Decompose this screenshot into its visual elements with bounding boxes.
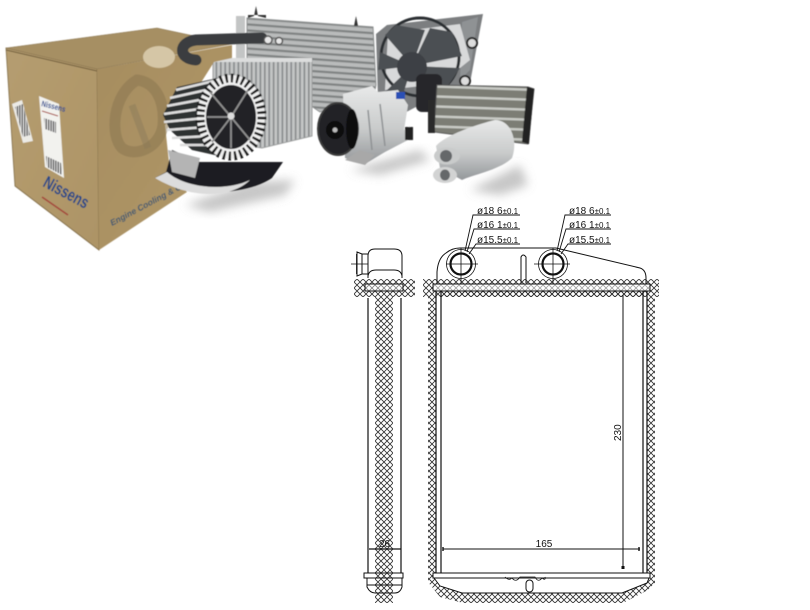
diameter labels left: ø15.5±0.1 xyxy=(477,235,519,246)
hatch side view xyxy=(354,279,415,603)
dimension 26 xyxy=(369,539,401,550)
diameter labels right: ø15.5±0.1 xyxy=(569,235,611,246)
side view xyxy=(351,249,415,603)
pipe circles xyxy=(446,248,570,284)
A/C pipe xyxy=(182,36,282,60)
box logo: Nissens xyxy=(40,173,92,213)
compressor xyxy=(318,86,413,165)
diameter labels left: ø18 6±0.1 xyxy=(477,206,519,217)
dimension 165: 165 xyxy=(536,539,553,550)
diameter labels left: ø16 1±0.1 xyxy=(477,220,519,231)
fan and shroud xyxy=(376,14,483,118)
blower motor xyxy=(155,75,283,194)
hatch front view xyxy=(423,279,659,603)
evaporator xyxy=(213,58,312,148)
box circular Q logo xyxy=(115,80,163,152)
rear condenser xyxy=(236,6,376,112)
front view xyxy=(423,206,659,603)
receiver drier xyxy=(433,120,514,183)
shadows under products xyxy=(185,150,528,212)
diameter labels right: ø18 6±0.1 xyxy=(569,206,611,217)
box barcode sticker xyxy=(12,100,33,143)
dimension 230: 230 xyxy=(613,424,624,441)
dimension 230 xyxy=(613,295,624,569)
diameter labels right: ø16 1±0.1 xyxy=(569,220,611,231)
diameter labels right xyxy=(569,206,611,246)
leader lines xyxy=(465,215,611,254)
box tagline: Engine Cooling & Climate xyxy=(108,170,205,228)
product photo collage xyxy=(6,6,534,250)
dimension 165 xyxy=(443,539,640,551)
box label white xyxy=(39,96,67,178)
small radiator xyxy=(428,85,534,144)
dimension 26: 26 xyxy=(379,539,390,550)
box label white: Nissens xyxy=(40,98,67,114)
technical drawing xyxy=(351,206,659,603)
cardboard box xyxy=(6,28,232,250)
diameter labels left xyxy=(477,206,519,246)
